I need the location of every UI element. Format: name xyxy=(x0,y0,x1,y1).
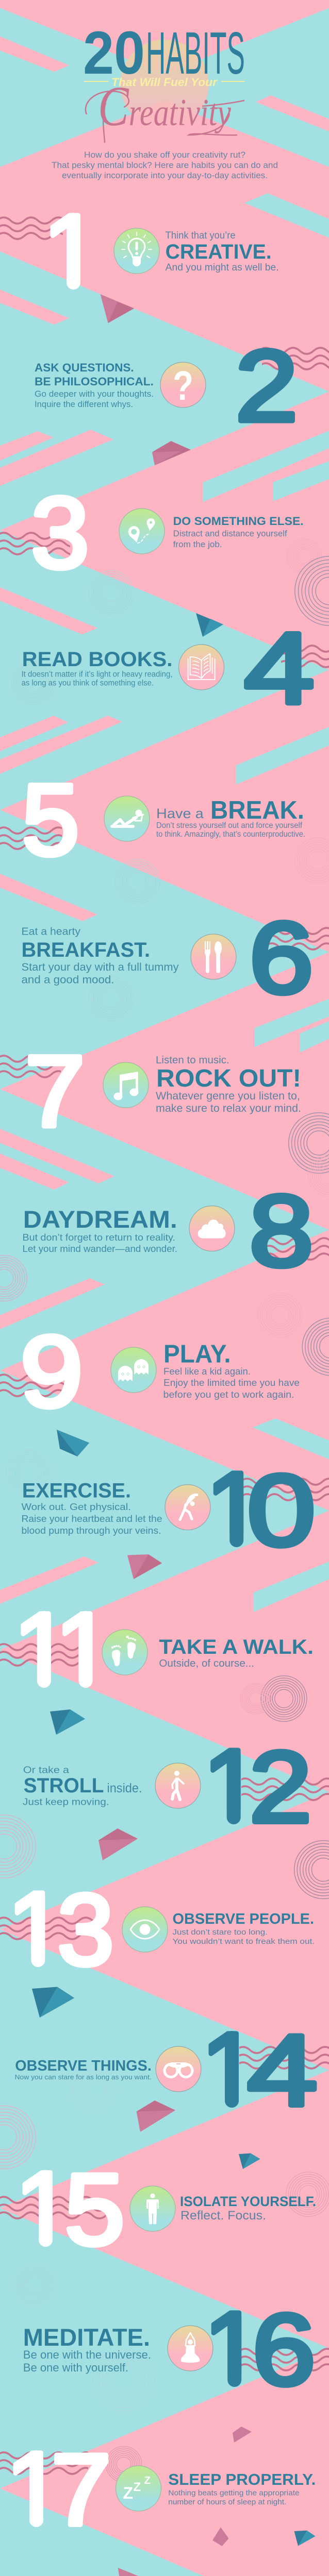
number 18 xyxy=(210,2572,322,2576)
text: It doesn’t matter if it’s light or heavy reading, xyxy=(22,670,172,679)
text: EXERCISE. xyxy=(22,1480,131,1502)
icon: zzz: Z xyxy=(133,2480,141,2494)
text: Whatever genre you listen to, xyxy=(156,1090,300,1102)
text xyxy=(23,2324,151,2374)
text xyxy=(35,361,154,409)
icon: meditating person xyxy=(168,2326,213,2371)
icon: ghosts xyxy=(111,1347,156,1393)
habit 16: meditate xyxy=(24,2310,314,2388)
icon: stretching person xyxy=(165,1485,210,1530)
number 14 xyxy=(208,2031,317,2108)
text: MEDITATE. xyxy=(23,2324,150,2351)
intro text xyxy=(52,150,278,180)
text xyxy=(23,1206,177,1254)
icon: zzz: Z xyxy=(144,2475,151,2486)
text: BREAKFAST. xyxy=(22,939,150,961)
text: Now you can stare for as long as you want. xyxy=(14,2073,152,2081)
text: Start your day with a full tummy xyxy=(22,961,179,973)
text xyxy=(180,2194,316,2223)
habit 9: play xyxy=(20,1315,300,1428)
text: CREATIVE. xyxy=(166,241,272,263)
number 6: 6 xyxy=(249,901,314,1014)
text xyxy=(173,515,304,549)
icon: binoculars xyxy=(156,2046,201,2092)
number 10: 0 xyxy=(247,1454,316,1567)
icon: eye xyxy=(122,1907,168,1952)
text: Let your mind wander—and wonder. xyxy=(23,1244,177,1254)
icon: walking person xyxy=(155,1763,201,1808)
text xyxy=(22,1480,162,1536)
habit 17: sleep properly xyxy=(13,2450,315,2527)
number 11 xyxy=(21,1611,93,1688)
script word: Creativity: Creativity xyxy=(98,75,231,138)
habit 15: isolate yourself xyxy=(23,2170,316,2248)
number 15 xyxy=(23,2170,123,2248)
habit 8: daydream xyxy=(23,1174,314,1287)
text: and a good mood. xyxy=(22,974,114,986)
icon: standing person xyxy=(130,2186,175,2231)
icon: music notes xyxy=(103,1062,149,1108)
icon: question mark xyxy=(160,362,206,409)
text: blood pump through your veins. xyxy=(22,1526,161,1536)
subtitle: That Will Fuel Your xyxy=(111,76,218,89)
text: Be one with yourself. xyxy=(23,2361,128,2374)
text: Don’t stress yourself out and force yourself xyxy=(156,821,303,830)
text: ISOLATE YOURSELF. xyxy=(180,2194,316,2209)
text xyxy=(156,796,305,839)
text xyxy=(22,926,179,986)
habit 7: rock out xyxy=(25,1035,301,1148)
text: DO SOMETHING ELSE. xyxy=(173,515,304,528)
icon: map pins xyxy=(119,509,164,554)
number 16: 6 xyxy=(252,2293,316,2406)
habit 14: observe things xyxy=(15,2031,317,2108)
icon: footprints xyxy=(102,1630,147,1675)
number 17: 7 xyxy=(51,2433,111,2546)
habit 5: have a break xyxy=(22,763,305,876)
number 12 xyxy=(210,1748,309,1824)
text: DAYDREAM. xyxy=(23,1206,177,1233)
icon: zzz: Z xyxy=(123,2484,133,2502)
text: Listen to music. xyxy=(156,1055,229,1066)
text: Have a xyxy=(156,806,204,821)
text: Work out. Get physical. xyxy=(22,1502,131,1512)
icon: fork and spoon xyxy=(191,934,236,979)
text: TAKE A WALK. xyxy=(159,1636,314,1658)
text: to think. Amazingly, that’s counterproductive. xyxy=(156,830,305,839)
number 2: 2 xyxy=(235,329,298,443)
icon: reclining person xyxy=(104,796,150,841)
text: Outside, of course... xyxy=(159,1658,254,1669)
text: You wouldn’t want to freak them out. xyxy=(172,1937,315,1946)
icon: zzz xyxy=(116,2466,161,2511)
number 7: 7 xyxy=(25,1035,85,1148)
text: Raise your heartbeat and let the xyxy=(22,1514,162,1524)
number 15: 1 xyxy=(14,2150,73,2267)
number 8: 8 xyxy=(249,1174,314,1287)
number 10 xyxy=(213,1470,314,1549)
text: SLEEP PROPERLY. xyxy=(168,2470,316,2488)
text xyxy=(168,2470,316,2506)
number 1 xyxy=(51,213,80,290)
text xyxy=(22,648,173,688)
habit 18: drink beer xyxy=(10,2572,322,2576)
text xyxy=(156,1055,301,1114)
title block xyxy=(83,19,245,143)
text: Distract and distance yourself xyxy=(173,529,287,538)
habit 1: creative xyxy=(51,213,278,290)
number 13: 3 xyxy=(57,1873,114,1987)
number 13: 1 xyxy=(7,1870,65,1988)
subtitle rules xyxy=(84,81,244,82)
text xyxy=(172,1911,315,1946)
habit 11: take a walk xyxy=(21,1611,312,1688)
number 12: 2 xyxy=(249,1730,312,1843)
text: READ BOOKS. xyxy=(22,648,173,671)
text: inside. xyxy=(107,1781,142,1795)
text: ASK QUESTIONS. xyxy=(35,361,134,374)
text: And you might as well be. xyxy=(166,262,279,273)
text: Reflect. Focus. xyxy=(180,2209,266,2223)
text: But don’t forget to return to reality. xyxy=(23,1232,175,1243)
text: Think that you’re xyxy=(166,230,236,241)
text: number of hours of sleep at night. xyxy=(168,2498,286,2506)
habit 4: read books xyxy=(22,612,315,725)
icon: cloud xyxy=(189,1206,235,1251)
habit 12: stroll xyxy=(23,1748,309,1824)
habit 13: observe people xyxy=(14,1890,314,1968)
number 5: 5 xyxy=(22,763,79,876)
text xyxy=(23,1765,142,1807)
number 17: 1 xyxy=(5,2431,63,2547)
text: Be one with the universe. xyxy=(23,2348,151,2361)
icon: open book xyxy=(179,645,224,690)
number 16: 1 xyxy=(204,2291,262,2407)
number 12: 1 xyxy=(203,1728,261,1844)
number 9: 9 xyxy=(20,1315,83,1428)
text: as long as you think of something else. xyxy=(22,679,154,688)
intro text: That pesky mental block? Here are habits you can do and xyxy=(52,160,278,170)
number 11: 1 xyxy=(13,1591,71,1708)
text: BREAK. xyxy=(210,796,304,824)
number 16 xyxy=(211,2310,314,2388)
number 17 xyxy=(13,2450,108,2527)
text: OBSERVE THINGS. xyxy=(15,2058,152,2074)
icon: question mark: ? xyxy=(173,363,193,409)
text xyxy=(159,1636,314,1669)
text: Eat a hearty xyxy=(22,926,80,938)
number 1: 1 xyxy=(42,193,101,310)
text: Feel like a kid again. xyxy=(163,1366,251,1377)
text: Nothing beats getting the appropriate xyxy=(168,2488,300,2498)
text: make sure to relax your mind. xyxy=(156,1103,301,1114)
number 10: 1 xyxy=(206,1451,264,1567)
text xyxy=(166,230,279,273)
text: STROLL xyxy=(24,1774,104,1797)
text: Go deeper with your thoughts. xyxy=(35,389,154,399)
number 14: 4 xyxy=(247,2013,318,2127)
habit 6: breakfast xyxy=(22,901,314,1014)
number 13 xyxy=(14,1890,112,1968)
text: before you get to work again. xyxy=(163,1389,294,1400)
text: Enjoy the limited time you have xyxy=(163,1378,300,1388)
text: Just don’t stare too long. xyxy=(172,1928,268,1937)
title: 20: 20 xyxy=(83,19,145,87)
intro text: How do you shake off your creativity rut? xyxy=(84,150,245,160)
habit 3: do something else xyxy=(31,476,304,589)
text: ROCK OUT! xyxy=(156,1065,301,1092)
number 14: 1 xyxy=(201,2011,259,2128)
number 11: 1 xyxy=(55,1591,113,1708)
text: OBSERVE PEOPLE. xyxy=(172,1911,314,1927)
text: from the job. xyxy=(173,540,222,549)
text: Just keep moving. xyxy=(23,1797,109,1807)
number 15: 5 xyxy=(64,2153,125,2266)
text: Or take a xyxy=(23,1765,70,1775)
text: BE PHILOSOPHICAL. xyxy=(35,375,154,388)
habit 10: exercise xyxy=(22,1470,314,1549)
intro text: eventually incorporate into your day-to-day activities. xyxy=(62,171,268,180)
number 4: 4 xyxy=(244,612,315,725)
habit 2: ask questions xyxy=(35,329,298,443)
number 3: 3 xyxy=(31,476,89,589)
text: PLAY. xyxy=(163,1341,231,1368)
text: Inquire the different whys. xyxy=(35,400,133,409)
icon: light bulb xyxy=(114,228,159,274)
text xyxy=(163,1341,300,1400)
